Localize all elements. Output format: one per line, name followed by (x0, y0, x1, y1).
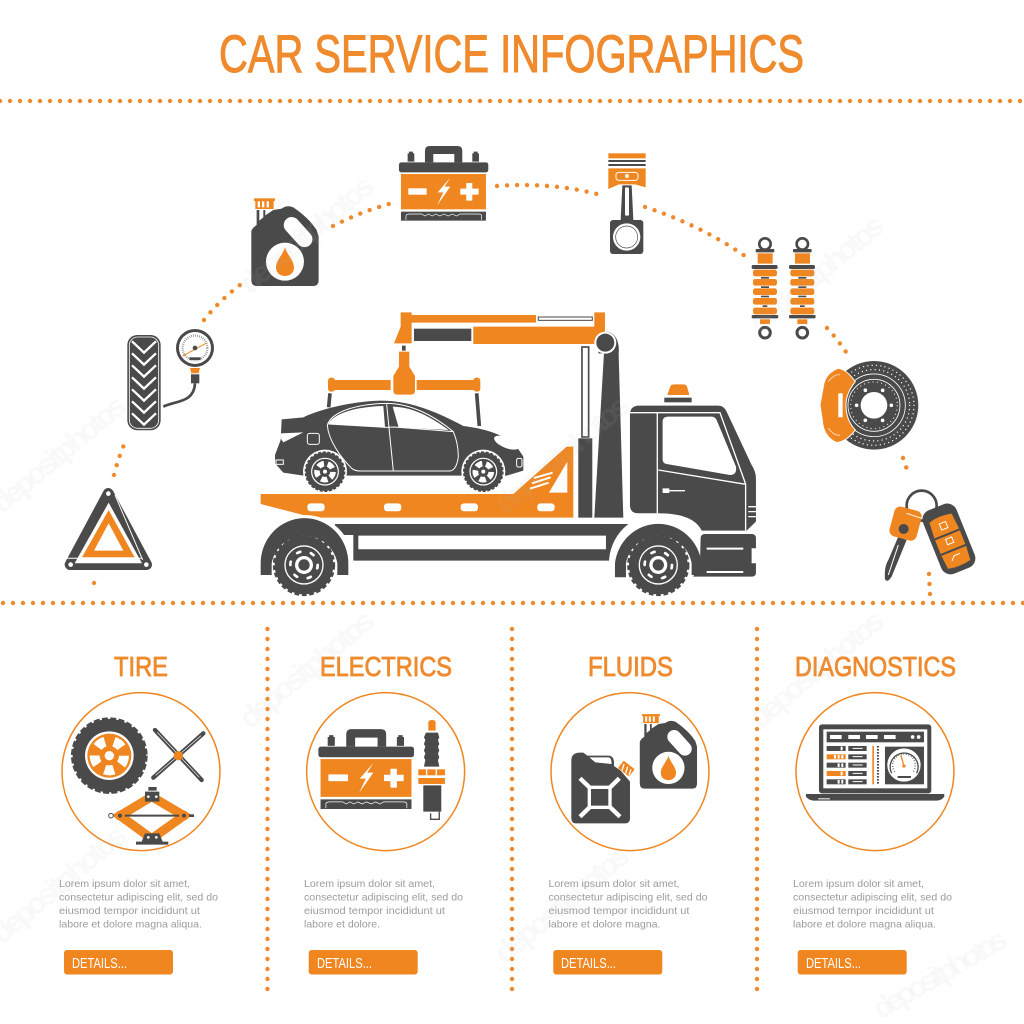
top dotted divider (0, 99, 1024, 103)
icon: car keys (885, 491, 978, 581)
key fob (919, 501, 978, 577)
left shock absorber (752, 238, 778, 338)
button: details (553, 950, 662, 974)
truck cab (609, 406, 756, 563)
roof beacon (664, 384, 692, 402)
text: tire description: Lorem ipsum dolor sit amet, (59, 878, 190, 890)
icon circle: tire tools (62, 693, 220, 851)
button: details: DETAILS... (317, 955, 372, 972)
flatbed platform (261, 447, 573, 518)
icon: oil canister (251, 198, 319, 286)
button: details: DETAILS... (806, 955, 861, 972)
watermarks: depositphotos (867, 922, 1013, 1024)
canister (640, 714, 697, 789)
text: tire description: labore et dolore magna aliqua. (59, 918, 202, 930)
spark plug (418, 720, 445, 819)
battery (318, 729, 414, 809)
watermarks: depositphotos (743, 604, 891, 735)
icon: piston (608, 153, 646, 254)
icon: tire tread and pressure gauge (127, 329, 214, 430)
tow truck illustration (257, 312, 756, 595)
column dividers (268, 629, 757, 990)
text: fluids description: Lorem ipsum dolor sit amet, (548, 878, 680, 890)
truck chassis (335, 524, 630, 561)
button: details (309, 950, 418, 974)
text: fluids description: consectetur adipiscing elit, sed do (548, 892, 708, 904)
text: electrics description: Lorem ipsum dolor sit amet, (304, 878, 435, 890)
panel: tire (59, 651, 220, 974)
icon circle: battery and spark plug (307, 693, 465, 851)
heading: electrics: ELECTRICS (320, 651, 452, 682)
button: details (798, 950, 907, 974)
text: diagnostics description: eiusmod tempor incididunt ut (793, 905, 934, 917)
speedometer (885, 747, 924, 784)
car on the platform (275, 401, 523, 494)
icon circle: jerrycan and canister (551, 693, 709, 851)
text: fluids description: labore et dolore magna. (548, 918, 660, 930)
text: tire description: eiusmod tempor incididunt ut (59, 905, 200, 917)
text: diagnostics description: consectetur adipiscing elit, sed do (793, 892, 952, 904)
tire tread (127, 335, 161, 430)
crane boom (394, 312, 605, 344)
text: electrics description: consectetur adipiscing elit, sed do (304, 892, 463, 904)
lifting hook and spreader bar (328, 346, 480, 426)
button: details: DETAILS... (561, 955, 616, 972)
icon: brake disc and caliper (820, 361, 918, 450)
front wheel and fender (615, 524, 702, 595)
button: details: DETAILS... (72, 955, 127, 972)
wheel (72, 719, 146, 793)
watermarks: depositphotos (233, 604, 381, 735)
panel: fluids (548, 651, 709, 974)
car rear wheel (306, 452, 344, 491)
icon circle: laptop diagnostics (796, 693, 954, 851)
heading: diagnostics: DIAGNOSTICS (795, 651, 956, 682)
icon: shock absorbers (752, 238, 816, 338)
brake disc (830, 361, 918, 450)
text: tire description (59, 878, 218, 930)
crane column (578, 332, 623, 518)
text: electrics description: eiusmod tempor incididunt ut (304, 905, 445, 917)
button: details (64, 950, 173, 974)
panel: electrics (304, 651, 465, 974)
jerrycan (571, 753, 635, 823)
key (885, 505, 923, 581)
icon: warning triangle (64, 491, 149, 567)
text: fluids description: eiusmod tempor incididunt ut (548, 905, 690, 917)
watermarks: depositphotos (488, 839, 636, 970)
front bumper (693, 534, 756, 577)
text: diagnostics description: Lorem ipsum dolor sit amet, (793, 878, 924, 890)
brake caliper (820, 368, 855, 443)
watermarks: depositphotos (488, 389, 636, 520)
panel: diagnostics (793, 651, 956, 974)
icon: car battery (399, 146, 488, 221)
dotted arc connecting the service icons (94, 185, 930, 594)
text: diagnostics description (793, 878, 952, 930)
watermarks: depositphotos (233, 169, 381, 300)
right shock absorber (789, 238, 816, 338)
heading: fluids: FLUIDS (588, 651, 673, 682)
text: tire description: consectetur adipiscing elit, sed do (59, 892, 218, 904)
watermarks: depositphotos (743, 209, 891, 340)
cross wrench (153, 730, 203, 780)
text: electrics description: labore et dolore. (304, 918, 380, 930)
title: CAR SERVICE INFOGRAPHICS (219, 25, 804, 84)
heading: tire: TIRE (114, 651, 168, 682)
car front wheel (464, 452, 503, 491)
bottom dotted divider (3, 601, 1024, 605)
rear wheel and fender (257, 515, 353, 595)
text: fluids description (548, 878, 708, 930)
pressure gauge (163, 329, 214, 407)
text: diagnostics description: labore et dolore magna aliqua. (793, 918, 936, 930)
laptop (806, 724, 944, 801)
text: electrics description (304, 878, 463, 930)
scissor jack (109, 787, 194, 845)
